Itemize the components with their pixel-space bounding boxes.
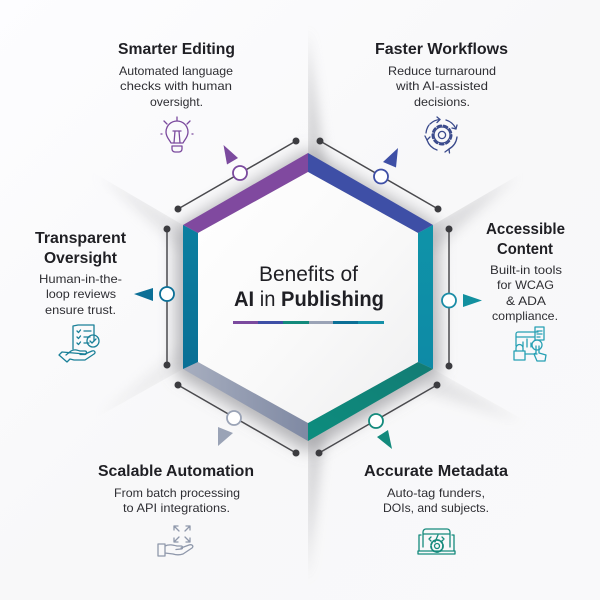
text block: Smarter Editing: Automated language: [119, 64, 233, 78]
text block: Smarter Editing: [118, 41, 235, 109]
text block: Transparent Oversight: loop reviews: [46, 287, 116, 301]
text block: Faster Workflows: with AI-assisted: [395, 79, 488, 93]
text block: Accurate Metadata: Auto-tag funders,: [387, 486, 485, 500]
text block: Smarter Editing: oversight.: [150, 95, 203, 109]
text block: Transparent Oversight: [35, 230, 126, 317]
icon: light bulb: [161, 117, 193, 152]
connector: left: [134, 226, 174, 368]
text block: Accessible Content: compliance.: [492, 309, 558, 323]
icon: accessibility dashboard: [514, 327, 546, 361]
segment: top right blue: [308, 153, 433, 233]
text block: Scalable Automation: [98, 463, 254, 515]
connector: bottom left: [174, 382, 300, 456]
text block: Accessible Content: Content: [497, 241, 553, 258]
text block: Accessible Content: for WCAG: [497, 278, 554, 292]
hexagon ring: [183, 153, 433, 441]
icon: expand arrows over hand: [158, 526, 193, 556]
segment: top left purple: [183, 153, 308, 233]
connector: right: [442, 226, 482, 370]
icon: document on hand: [59, 325, 99, 362]
text block: Faster Workflows: [375, 41, 508, 109]
background panels: [120, 52, 507, 560]
connector: top left: [174, 138, 300, 212]
segment: right teal: [418, 225, 433, 369]
text block: Smarter Editing: Smarter Editing: [118, 41, 235, 58]
connector: top right: [316, 138, 442, 212]
central title: [234, 262, 384, 311]
text block: Accessible Content: [486, 221, 565, 323]
text block: Accurate Metadata: DOIs, and subjects.: [383, 501, 489, 515]
text block: Accessible Content: & ADA: [506, 294, 546, 308]
hexagon centre: [198, 172, 418, 423]
text block: Faster Workflows: Reduce turnaround: [388, 64, 496, 78]
text block: Accurate Metadata: [364, 463, 508, 515]
title underline: [233, 321, 384, 324]
text block: Scalable Automation: From batch processing: [114, 486, 240, 500]
text block: Scalable Automation: to API integrations.: [123, 501, 230, 515]
text block: Transparent Oversight: Transparent: [35, 230, 126, 247]
text block: Accessible Content: Built-in tools: [490, 263, 562, 277]
icon: gear with cycle arrows: [425, 117, 457, 153]
title line 2: AI in Publishing: [234, 287, 384, 311]
text block: Scalable Automation: Scalable Automation: [98, 463, 254, 480]
text block: Accurate Metadata: Accurate Metadata: [364, 463, 508, 480]
segment: left teal: [183, 225, 198, 369]
icon: laptop with code gear: [418, 529, 455, 554]
text block: Transparent Oversight: Oversight: [44, 250, 117, 267]
text block: Faster Workflows: Faster Workflows: [375, 41, 508, 58]
text block: Transparent Oversight: ensure trust.: [45, 303, 116, 317]
text block: Accessible Content: Accessible: [486, 221, 565, 238]
segment: bottom right green: [308, 362, 433, 441]
text block: Transparent Oversight: Human-in-the-: [39, 272, 122, 286]
connector: bottom right: [316, 382, 440, 456]
hexagon shadow: [176, 150, 440, 452]
text block: Smarter Editing: checks with human: [120, 79, 232, 93]
segment: bottom left slate: [183, 362, 308, 441]
title line 1: Benefits of: [259, 262, 358, 286]
text block: Faster Workflows: decisions.: [414, 95, 470, 109]
